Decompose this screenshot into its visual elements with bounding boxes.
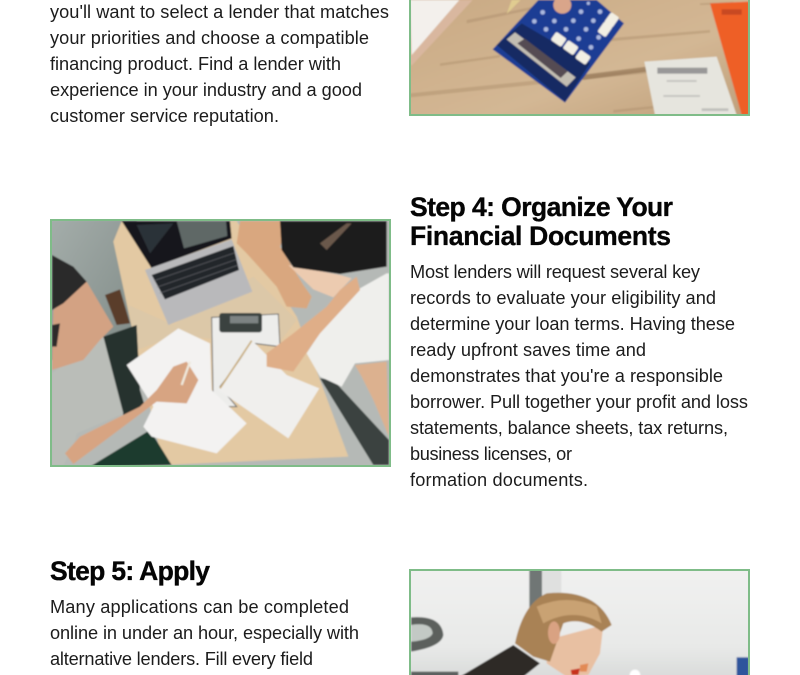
heading: step 4 xyxy=(410,192,673,251)
text block: step 3 ending: your priorities and choose a compatible xyxy=(50,28,369,48)
photo frame: people xyxy=(51,220,390,466)
text block: step 3 ending: financing product. Find a lender with xyxy=(50,54,341,74)
text block: step 4 body: demonstrates that you're a responsible xyxy=(410,366,723,386)
heading: step 4: Step 4: Organize Your xyxy=(410,192,673,222)
photo frame: calculator xyxy=(410,0,749,115)
text block: step 4 body: Most lenders will request several key xyxy=(410,262,701,282)
text block: step 4 body xyxy=(410,262,748,490)
text block: step 4 body: ready upfront saves time and xyxy=(410,340,646,360)
text block: step 5 body: online in under an hour, especially with xyxy=(50,623,359,643)
text block: step 4 body: borrower. Pull together your profit and loss xyxy=(410,392,748,412)
photo: calculator on wooden desk xyxy=(407,0,753,120)
text block: step 4 body: determine your loan terms. Having these xyxy=(410,314,735,334)
text block: step 3 ending xyxy=(50,2,389,126)
text block: step 3 ending: customer service reputation. xyxy=(50,106,279,126)
text block: step 4 body: records to evaluate your eligibility and xyxy=(410,288,716,308)
text block: step 5 body: alternative lenders. Fill every field xyxy=(50,649,313,669)
heading: step 4: Financial Documents xyxy=(410,221,671,251)
photo: woman working by window xyxy=(407,567,753,675)
text block: step 3 ending: experience in your industry and a good xyxy=(50,80,362,100)
text block: step 4 body: formation documents. xyxy=(410,470,588,490)
text block: step 5 body xyxy=(50,597,359,669)
text block: step 5 body: Many applications can be completed xyxy=(50,597,349,617)
photo frame: woman xyxy=(410,570,749,675)
text block: step 4 body: statements, balance sheets, tax returns, xyxy=(410,418,728,438)
text block: step 4 body: business licenses, or xyxy=(410,444,572,464)
photo: two people reviewing paperwork xyxy=(50,220,392,467)
heading: step 5: Step 5: Apply xyxy=(50,556,210,586)
text block: step 3 ending: you'll want to select a lender that matches xyxy=(50,2,389,22)
